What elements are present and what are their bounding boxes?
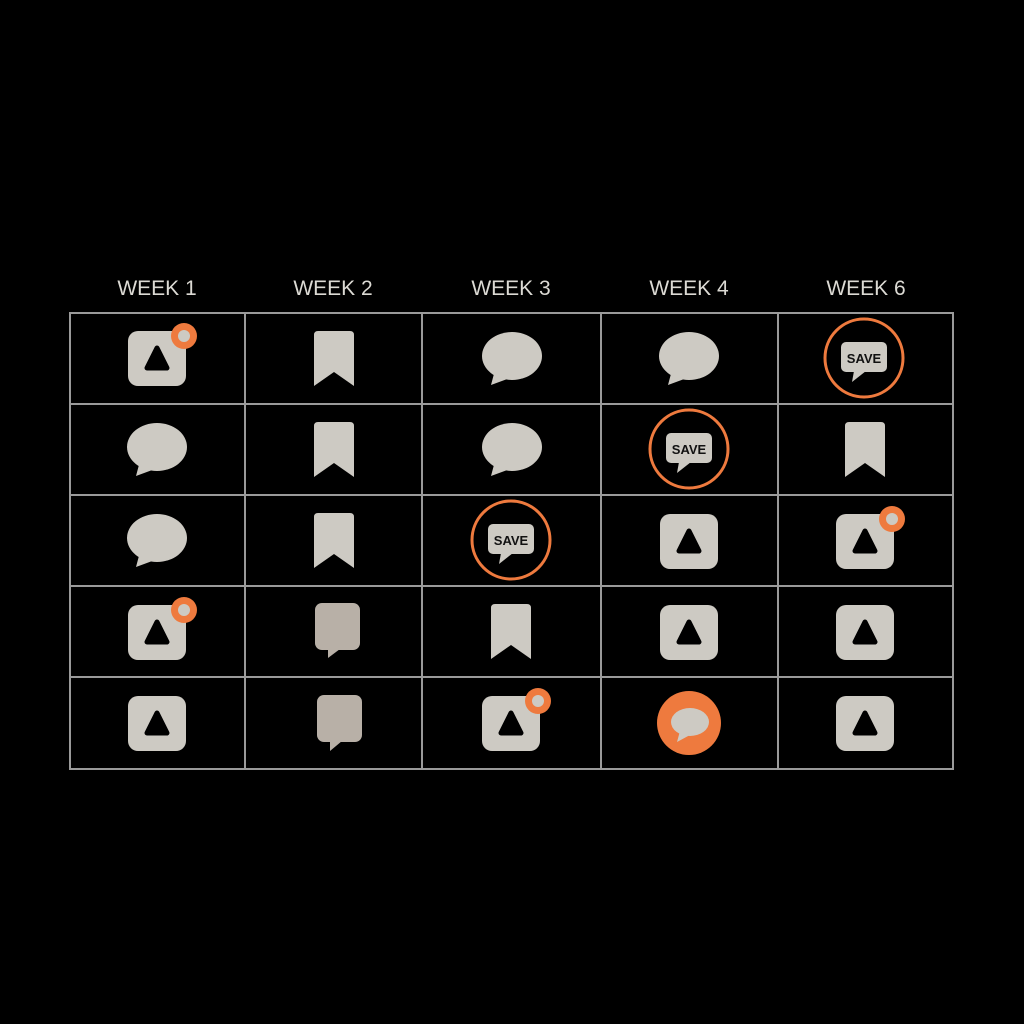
icon: bookmark W6R2	[845, 422, 885, 477]
column headers: WEEK 3	[471, 277, 551, 300]
column headers: WEEK 1	[117, 277, 197, 300]
icon: alert square W6R5	[836, 696, 894, 751]
icon: SAVE circled W3R3	[472, 501, 550, 579]
icon: alert square W1R5	[128, 696, 186, 751]
icon: alert square with badge W1R1	[128, 323, 197, 386]
icon: orange circle bubble W4R5	[657, 691, 721, 755]
icon: bookmark W2R2	[314, 422, 354, 477]
icon: square bubble W2R5	[317, 695, 362, 751]
icon: bubble W1R3	[127, 514, 187, 567]
icon: bookmark W2R1	[314, 331, 354, 386]
icon: bookmark W2R3	[314, 513, 354, 568]
icon: alert square with badge W3R5	[482, 688, 551, 751]
icon: alert square with badge W6R3	[836, 506, 905, 569]
icon: square bubble W2R4	[315, 603, 360, 658]
icon: SAVE circled W4R2	[650, 410, 728, 488]
icon: alert square W4R4	[660, 605, 718, 660]
column headers: WEEK 4	[649, 277, 729, 300]
icon: bubble W1R2	[127, 423, 187, 476]
icon: bubble W3R2	[482, 423, 542, 476]
icon: bubble W3R1	[482, 332, 542, 385]
icon: bookmark W3R4	[491, 604, 531, 659]
icon: bubble W4R1	[659, 332, 719, 385]
icon: SAVE circled W3R3: SAVE	[494, 533, 529, 548]
icon: alert square with badge W1R4	[128, 597, 197, 660]
icon: alert square W4R3	[660, 514, 718, 569]
icon: alert square W6R4	[836, 605, 894, 660]
column headers: WEEK 2	[293, 277, 373, 300]
icon: SAVE circled W6R1	[825, 319, 903, 397]
icon: SAVE circled W6R1: SAVE	[847, 351, 882, 366]
icon: SAVE circled W4R2: SAVE	[672, 442, 707, 457]
column headers: WEEK 6	[826, 277, 906, 300]
column headers	[117, 277, 906, 300]
